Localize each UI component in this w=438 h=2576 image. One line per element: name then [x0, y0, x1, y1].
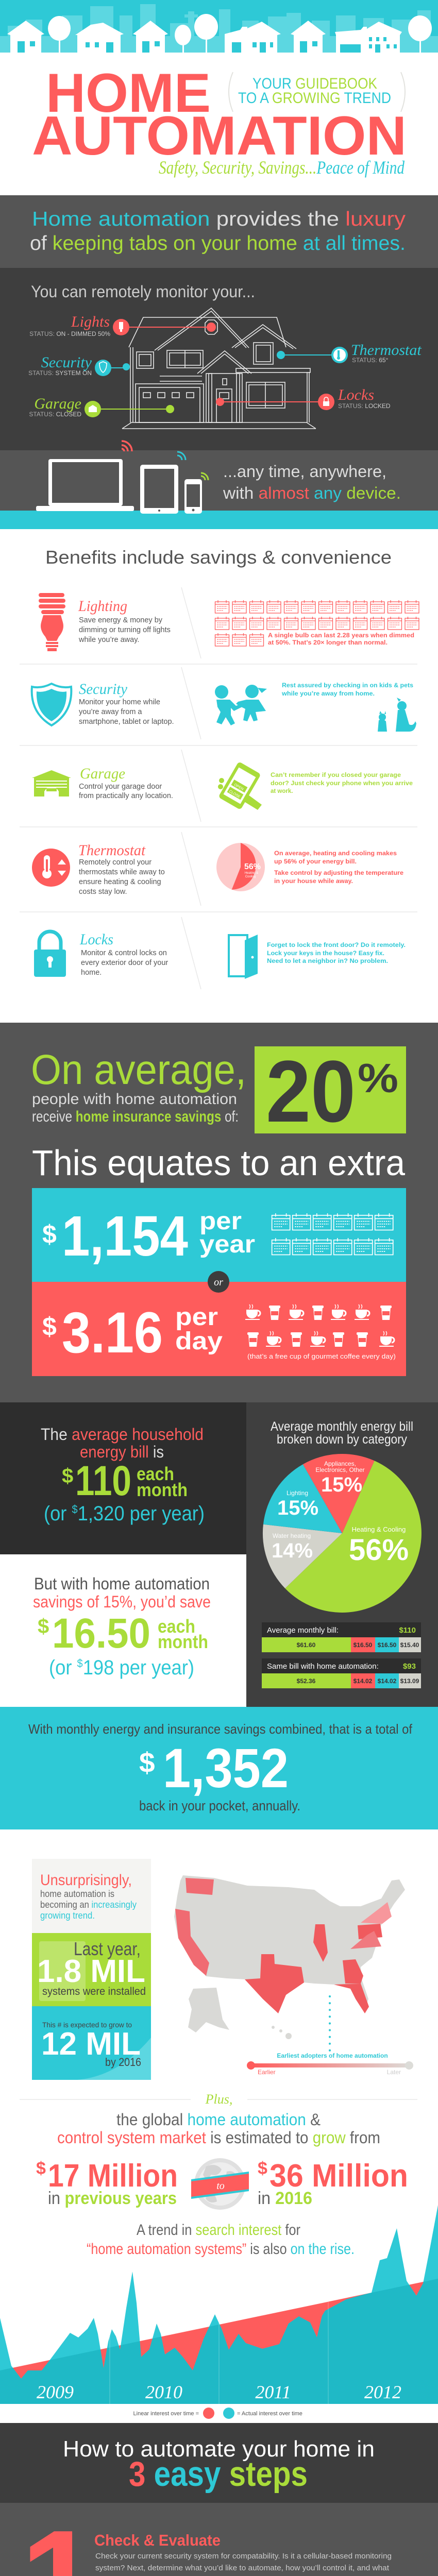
panel: average energy bill: energy bill is [80, 1443, 164, 1461]
panel: devices: ...any time, anywhere, [223, 462, 386, 481]
chart: pie: 15% [277, 1497, 318, 1519]
callout: per day: (that’s a free cup of gourmet coffee every day) [247, 1352, 396, 1360]
icon: globe with ribbon [191, 2158, 249, 2210]
label: thermostat [277, 342, 422, 364]
row: thermostat: ensure heating & cooling [79, 878, 161, 886]
row: locks [34, 931, 406, 979]
label: garage: STATUS: CLOSED [29, 411, 81, 418]
callout: 1.8 MIL: 1.8 MIL [37, 1954, 145, 1989]
title: HOME AUTOMATION: HOME [46, 62, 211, 124]
panel: total savings: With monthly energy and insurance savings combined, that is a total of [28, 1721, 413, 1737]
bar: average monthly bill [262, 1622, 421, 1652]
chart: search interest area [0, 2205, 438, 2404]
panel: average energy bill: each [137, 1463, 174, 1484]
chart: 56% pie: Cooling [245, 875, 256, 878]
row: thermostat: up 56% of your energy bill. [274, 859, 357, 865]
row: garage: from practically any location. [79, 792, 173, 800]
bar: average monthly bill: $110 [399, 1626, 416, 1635]
icon: door [229, 935, 258, 979]
row: security: while you’re away from home. [281, 691, 375, 697]
callout: 17 to 36 million: $ [258, 2159, 267, 2178]
panel: insurance savings: On average, [31, 1046, 246, 1093]
step 1: Check your current security system for compatability. Is it a cellular-based monitoring [95, 2552, 392, 2561]
bar: bill with automation: $13.09 [400, 1677, 419, 1685]
step 1 [21, 2502, 406, 2576]
heading: market growth: Plus, [205, 2092, 232, 2107]
icon: lock [34, 931, 66, 977]
panel: average energy bill: (or [44, 1502, 69, 1525]
callout: 17 to 36 million: in 2016 [258, 2189, 312, 2208]
subtitle: guidebook [229, 72, 405, 112]
panel: growing trend stats: home automation is [40, 1889, 114, 1899]
panel: growing trend stats [32, 1859, 151, 2080]
panel: average energy bill: $ [72, 1503, 78, 1516]
icon: thermostat [32, 849, 70, 887]
callout: 20%: % [358, 1055, 398, 1101]
bar: bill with automation: $14.02 [378, 1677, 397, 1685]
panel: devices: with almost any device. [223, 484, 401, 502]
row: security: you’re away from a [79, 708, 142, 716]
panel: savings with automation: month [158, 1631, 208, 1652]
text: search interest: A trend in search interest for [137, 2222, 300, 2239]
callout: per day [32, 1282, 406, 1376]
bar: average monthly bill: Average monthly bill: [267, 1626, 339, 1635]
row: thermostat: On average, heating and cooling makes [274, 851, 397, 857]
subtitle: guidebook: TO A GROWING TREND [238, 90, 391, 107]
bar: bill with automation: $14.02 [353, 1677, 373, 1685]
row: locks: Lock your keys in the house? Easy fix. [267, 951, 384, 957]
row: thermostat: in your house while away. [274, 878, 353, 885]
chart: 56% pie: Heating & [245, 872, 258, 875]
icon: tablet [140, 452, 186, 514]
chart: search interest area: 2010 [145, 2382, 182, 2402]
panel: average energy bill [0, 1402, 246, 1554]
panel: remote monitoring house: You can remotely monitor your... [31, 282, 255, 301]
step 1: Check & Evaluate [94, 2531, 221, 2549]
panel: insurance savings: receive home insurance savings of: [32, 1108, 239, 1125]
label: thermostat: STATUS: 65° [352, 357, 389, 364]
panel: total savings [0, 1707, 438, 1829]
heading: 3 easy steps: 3 easy steps [129, 2454, 308, 2494]
calendar grid [215, 600, 419, 646]
panel: insurance savings: This equates to an extra [32, 1143, 405, 1183]
text: search interest: “home automation systems” is also on the rise. [87, 2241, 355, 2258]
callout: per day: day [175, 1328, 223, 1355]
icon: phone garage app: OPEN [233, 783, 244, 791]
bar: average monthly bill: $16.50 [378, 1641, 397, 1649]
legend: earliest adopters scale: Later [387, 2069, 401, 2076]
chart: pie: Appliances, [324, 1460, 356, 1467]
callout: per year: $ [42, 1220, 57, 1249]
row: thermostat: Thermostat [78, 842, 146, 859]
map: earliest adopters [174, 1875, 405, 2052]
row: garage [32, 761, 413, 810]
panel: savings with automation: 198 per year) [83, 1656, 194, 1679]
callout: 1.8 MIL [32, 1933, 151, 2006]
intro band: of keeping tabs on your home at all times. [30, 232, 406, 255]
callout: 12 MIL [32, 2006, 151, 2080]
label: locks: Locks [338, 386, 374, 403]
panel: average energy bill: The average household [41, 1425, 204, 1444]
label: lights: STATUS: ON - DIMMED 50% [29, 330, 110, 337]
row: lighting: Lighting [78, 598, 127, 615]
row: thermostat: thermostats while away to [79, 868, 165, 876]
panel: devices [0, 441, 438, 529]
panel: energy bill breakdown: Average monthly energy bill [271, 1419, 413, 1434]
panel: average energy bill: $ [62, 1465, 73, 1487]
row: locks: Forget to lock the front door? Do it remotely. [267, 942, 406, 948]
panel: energy bill breakdown [246, 1402, 438, 1707]
bar: bill with automation: $52.36 [297, 1677, 316, 1685]
row: lighting: Save energy & money by [79, 616, 163, 624]
callout: per day: per [175, 1303, 218, 1331]
title: HOME AUTOMATION [32, 62, 407, 166]
row: security: Monitor your home while [79, 698, 160, 706]
chart: 56% pie [216, 843, 265, 891]
row: lighting: dimming or turning off lights [79, 626, 171, 634]
chart: pie: Electronics, Other [315, 1466, 365, 1473]
bar: bill with automation: $93 [403, 1662, 416, 1671]
row: thermostat: Take control by adjusting the temperature [274, 870, 403, 876]
row: thermostat [32, 842, 403, 896]
callout: 17 to 36 million [36, 2158, 408, 2210]
panel: savings with automation: $ [77, 1657, 83, 1670]
panel: average energy bill: month [137, 1479, 188, 1500]
bar: bill with automation [262, 1658, 421, 1688]
callout: per year: year [199, 1231, 255, 1258]
row: security: smartphone, tablet or laptop. [79, 718, 174, 726]
heading: 3 easy steps: How to automate your home in [63, 2436, 375, 2462]
title: HOME AUTOMATION: AUTOMATION [32, 105, 407, 166]
heading: market growth [20, 2092, 417, 2147]
panel: growing trend stats: Unsurprisingly, [40, 1872, 132, 1889]
label: locks [216, 386, 391, 410]
heading: 3 easy steps [0, 2423, 438, 2503]
label: security: STATUS: SYSTEM ON [28, 369, 92, 377]
row: garage: door? Just check your phone when you arrive [271, 781, 413, 787]
icon: phone [184, 473, 208, 514]
icon: laptop [36, 441, 134, 511]
row: lighting: at 50%. That’s 20× longer than normal. [268, 640, 388, 646]
chart: search interest area: 2011 [255, 2382, 291, 2402]
icon: bulb [39, 593, 65, 651]
callout: per year [32, 1188, 406, 1282]
callout: 20% [255, 1043, 406, 1141]
panel: savings with automation: each [158, 1616, 195, 1637]
bar: bill with automation: Same bill with home automation: [267, 1662, 379, 1671]
callout: per year: 1,154 [62, 1205, 188, 1268]
bar: average monthly bill: $16.50 [353, 1641, 373, 1649]
callout: 1.8 MIL: Last year, [74, 1938, 141, 1959]
icon: globe with ribbon: to [216, 2180, 225, 2192]
callout: per day: $ [42, 1312, 57, 1341]
icon: garage [32, 770, 71, 796]
chart: search interest area: 2009 [37, 2382, 74, 2402]
tagline: Safety, Security, Savings...Peace of Mind [159, 157, 405, 178]
panel: savings with automation: savings of 15%, you’d save [33, 1592, 211, 1611]
callout: 20%: 20 [266, 1043, 356, 1141]
callout: 17 to 36 million: 17 Million [48, 2158, 178, 2194]
callout: 12 MIL: This # is expected to grow to [42, 2021, 132, 2029]
heading: market growth: control system market is estimated to grow from [57, 2128, 380, 2147]
icon: kids [215, 685, 267, 725]
row: security: Rest assured by checking in on kids & pets [282, 683, 413, 689]
row: thermostat: Remotely control your [79, 858, 151, 867]
callout: 12 MIL: 12 MIL [41, 2026, 141, 2062]
panel: savings with automation: $ [38, 1615, 49, 1638]
callout: 1.8 MIL: systems were installed [42, 1986, 146, 1997]
label: thermostat: Thermostat [351, 342, 422, 359]
intro band [0, 195, 438, 268]
row: security [32, 681, 416, 732]
row: lighting [39, 593, 419, 651]
panel: insurance savings [0, 1023, 438, 1402]
icon: or [208, 1271, 229, 1293]
row: locks: every exterior door of your [81, 959, 168, 967]
row: locks: Locks [79, 931, 113, 948]
legend: interest chart [133, 2408, 302, 2419]
chart: 56% pie: 56% [244, 862, 261, 871]
panel: remote monitoring house [0, 268, 438, 450]
chart: pie [263, 1454, 422, 1613]
chart: pie: Lighting [287, 1489, 308, 1497]
icon: shield [32, 684, 71, 725]
row: lighting: A single bulb can last 2.28 years when dimmed [268, 633, 414, 639]
legend: earliest adopters scale: Earlier [258, 2069, 276, 2076]
legend: earliest adopters scale [247, 2052, 413, 2076]
callout: 17 to 36 million: 36 Million [269, 2158, 408, 2194]
chart: pie: 56% [349, 1533, 409, 1567]
label: lights: Lights [71, 313, 110, 330]
subtitle: guidebook: YOUR GUIDEBOOK [252, 75, 377, 92]
panel: energy bill breakdown: broken down by category [277, 1432, 407, 1447]
label: lights [29, 313, 216, 337]
panel: total savings: $ [139, 1747, 155, 1778]
panel: savings with automation [0, 1554, 246, 1707]
row: garage: Control your garage door [79, 783, 162, 791]
heading: benefits: Benefits include savings & convenience [45, 547, 392, 568]
chart: pie: Heating & Cooling [352, 1526, 406, 1533]
row: locks: Monitor & control locks on [81, 949, 167, 957]
panel: growing trend stats: becoming an increasingly [40, 1900, 137, 1910]
row: garage: at work. [271, 788, 293, 794]
header skyline [0, 0, 438, 53]
icon: pets [378, 698, 416, 732]
panel: savings with automation: (or [49, 1656, 74, 1679]
chart: pie: 15% [321, 1473, 362, 1496]
label: locks: STATUS: LOCKED [338, 402, 391, 410]
bar: average monthly bill: $15.40 [400, 1641, 419, 1649]
label: garage [29, 395, 174, 418]
chart: pie: 14% [272, 1539, 313, 1562]
panel: average energy bill: 1,320 per year) [78, 1502, 205, 1525]
label: garage: Garage [34, 395, 81, 412]
panel: total savings: 1,352 [163, 1737, 289, 1799]
panel: total savings: back in your pocket, annually. [139, 1798, 300, 1814]
label: security [28, 354, 130, 377]
row: locks: Need to let a neighbor in? No problem. [267, 958, 388, 964]
row: security: Security [79, 681, 128, 698]
callout: per year: per [199, 1208, 242, 1235]
label: security: Security [41, 354, 92, 371]
intro band: Home automation provides the luxury [32, 208, 406, 230]
callout: per day: 3.16 [62, 1300, 163, 1365]
callout: 17 to 36 million: in previous years [48, 2189, 177, 2208]
icon: phone garage app: CLOSE [228, 790, 241, 799]
heading: market growth: the global home automation & [116, 2110, 321, 2129]
bar: average monthly bill: $61.60 [297, 1641, 316, 1649]
step 1: system? Next, determine what you’d like to automate, how you’ll control it, and what [95, 2564, 390, 2572]
panel: savings with automation: 16.50 [52, 1610, 150, 1657]
row: thermostat: costs stay low. [79, 888, 127, 896]
legend: interest chart: = Actual interest over time [237, 2411, 302, 2417]
icon: or: or [214, 1277, 223, 1288]
panel: savings with automation: But with home automation [34, 1574, 210, 1593]
legend: interest chart: Linear interest over time = [133, 2411, 199, 2417]
chart: pie: Water heating [273, 1532, 311, 1539]
row: garage: Can’t remember if you closed your garage [271, 772, 401, 778]
callout: 17 to 36 million: $ [36, 2159, 46, 2178]
panel: average energy bill: 110 [75, 1458, 131, 1504]
row: locks: home. [81, 969, 102, 977]
panel: insurance savings: people with home automation [32, 1091, 237, 1108]
legend: earliest adopters scale: Earliest adopters of home automation [277, 2052, 388, 2059]
row: lighting: while you’re away. [78, 636, 139, 644]
chart: search interest area: 2012 [364, 2382, 401, 2402]
icon: phone garage app [218, 761, 262, 810]
panel: growing trend stats: growing trend. [40, 1910, 95, 1921]
callout: 12 MIL: by 2016 [105, 2056, 141, 2069]
row: garage: Garage [80, 765, 125, 782]
text: search interest [87, 2222, 355, 2258]
